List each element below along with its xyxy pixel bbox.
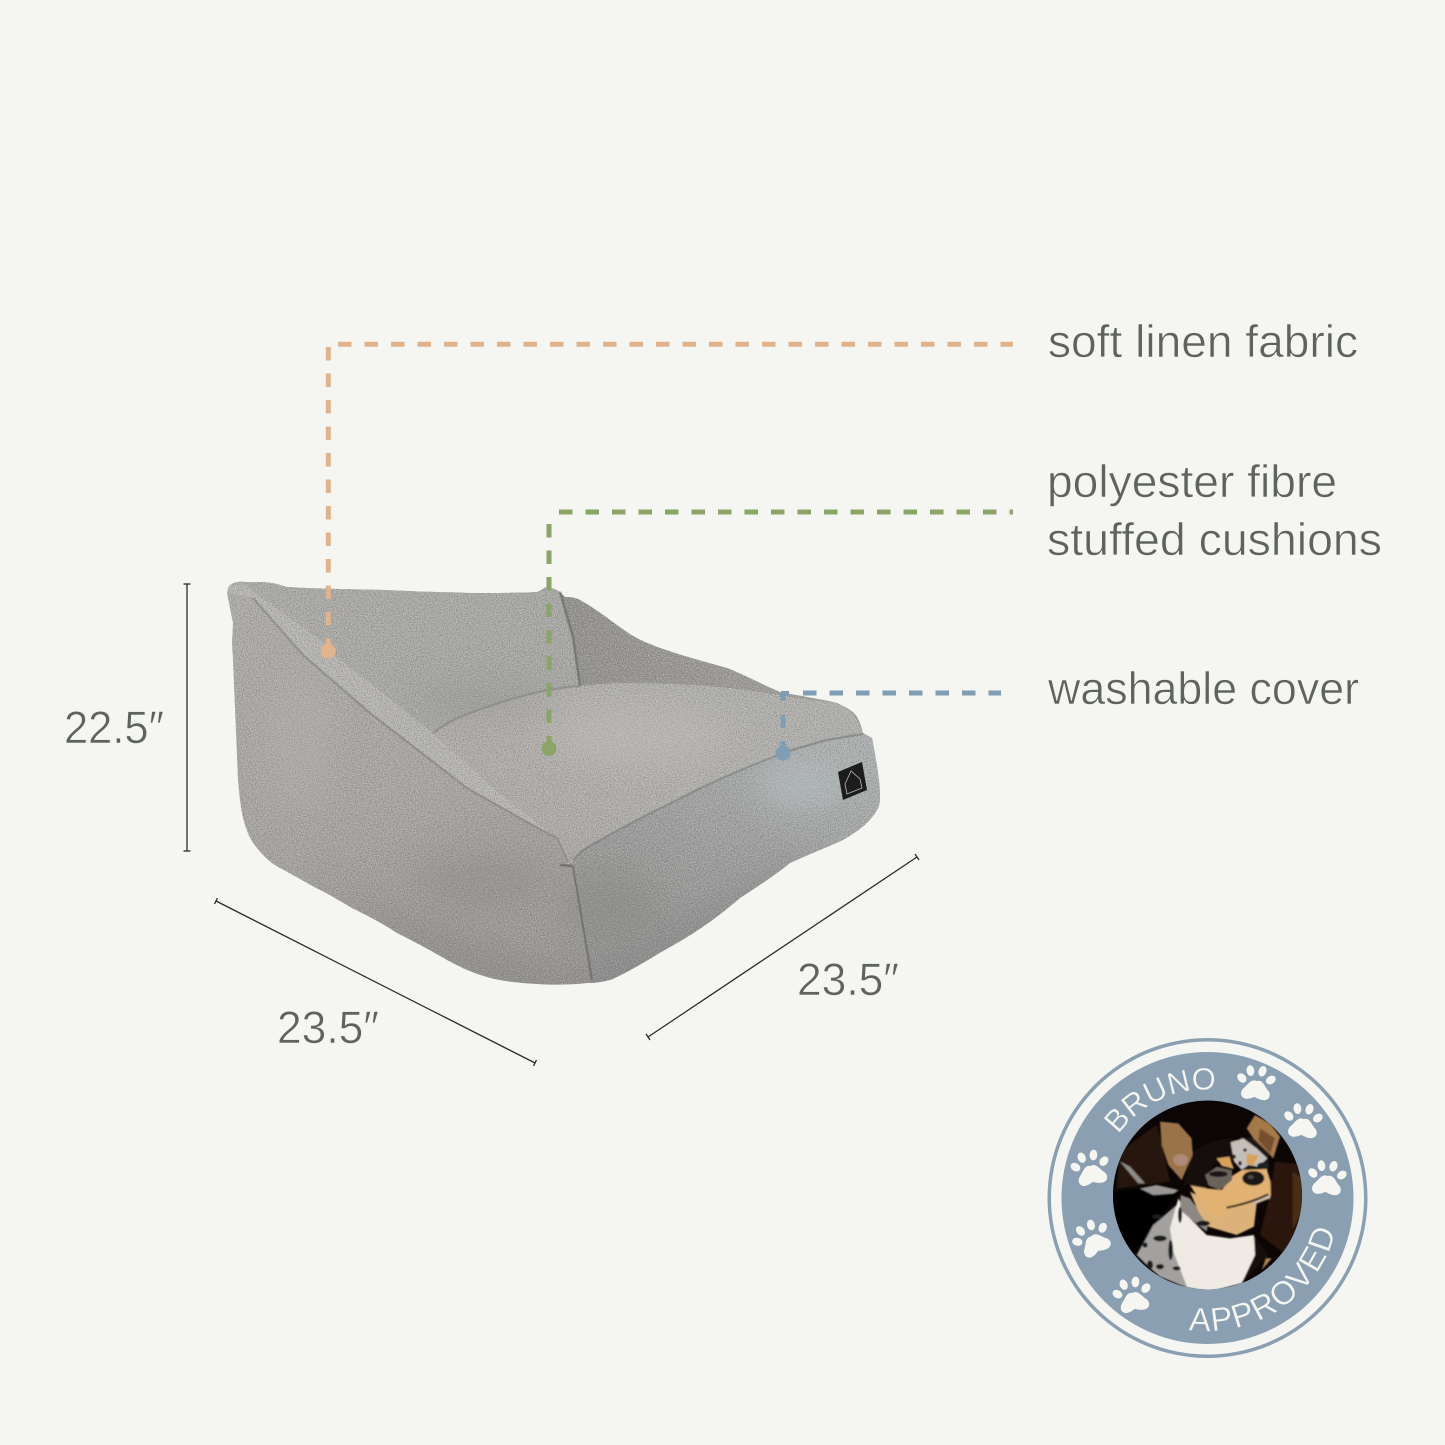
height value: 22.5″ (64, 702, 164, 753)
merle specks (1142, 1148, 1247, 1270)
right width dimension line (646, 854, 919, 1040)
badge text: Bruno: BRUNO (1104, 1068, 1214, 1132)
gray neck strip (1180, 1195, 1208, 1232)
badge text: Approved: APPROVED (1188, 1228, 1333, 1332)
head black (1183, 1138, 1242, 1188)
left depth dimension line (214, 898, 536, 1066)
left ear (1160, 1122, 1193, 1180)
badge rings (1048, 1038, 1368, 1358)
left arm top strip (228, 584, 553, 836)
left depth value: 23.5″ (277, 1002, 379, 1053)
dog photo (1110, 1098, 1307, 1294)
right front face (573, 734, 880, 983)
callout line: soft linen fabric (321, 344, 1013, 658)
right shoulder (1242, 1237, 1268, 1283)
merle body (1137, 1203, 1188, 1288)
chin and mouth (1243, 1194, 1270, 1204)
seat cushion (433, 683, 863, 865)
right ear (1247, 1115, 1280, 1158)
nose (1242, 1171, 1264, 1186)
ear inner (1173, 1154, 1188, 1166)
badge: Bruno approved (1048, 1038, 1368, 1358)
eye socket (1205, 1167, 1232, 1190)
neck (1190, 1192, 1257, 1235)
soft shading (265, 670, 845, 1000)
paw prints (1065, 1062, 1350, 1315)
bed label tag (838, 762, 867, 800)
label: washable cover: washable cover (1047, 663, 1359, 714)
right width value: 23.5″ (797, 954, 899, 1005)
muzzle (1190, 1169, 1271, 1218)
chest (1170, 1198, 1255, 1292)
merle forehead (1231, 1138, 1267, 1170)
height dimension line (184, 584, 190, 851)
right eye (1257, 1162, 1269, 1168)
callout line: polyester fibre (542, 512, 1013, 756)
right arm (561, 593, 858, 718)
label: polyester fibre stuffed cushions (1047, 456, 1382, 565)
callout line: washable cover (776, 692, 1001, 760)
seams (253, 592, 863, 980)
label: soft linen fabric: soft linen fabric (1048, 316, 1358, 367)
back cushion (242, 582, 579, 686)
dog bed photo (220, 575, 900, 1000)
left outer face (220, 575, 890, 995)
label: polyester fibre stuffed cushions: stuffed cushions (1047, 514, 1382, 565)
label: polyester fibre stuffed cushions: polyester fibre (1047, 456, 1337, 507)
brows (1217, 1157, 1234, 1169)
dark around forehead (1237, 1137, 1268, 1170)
